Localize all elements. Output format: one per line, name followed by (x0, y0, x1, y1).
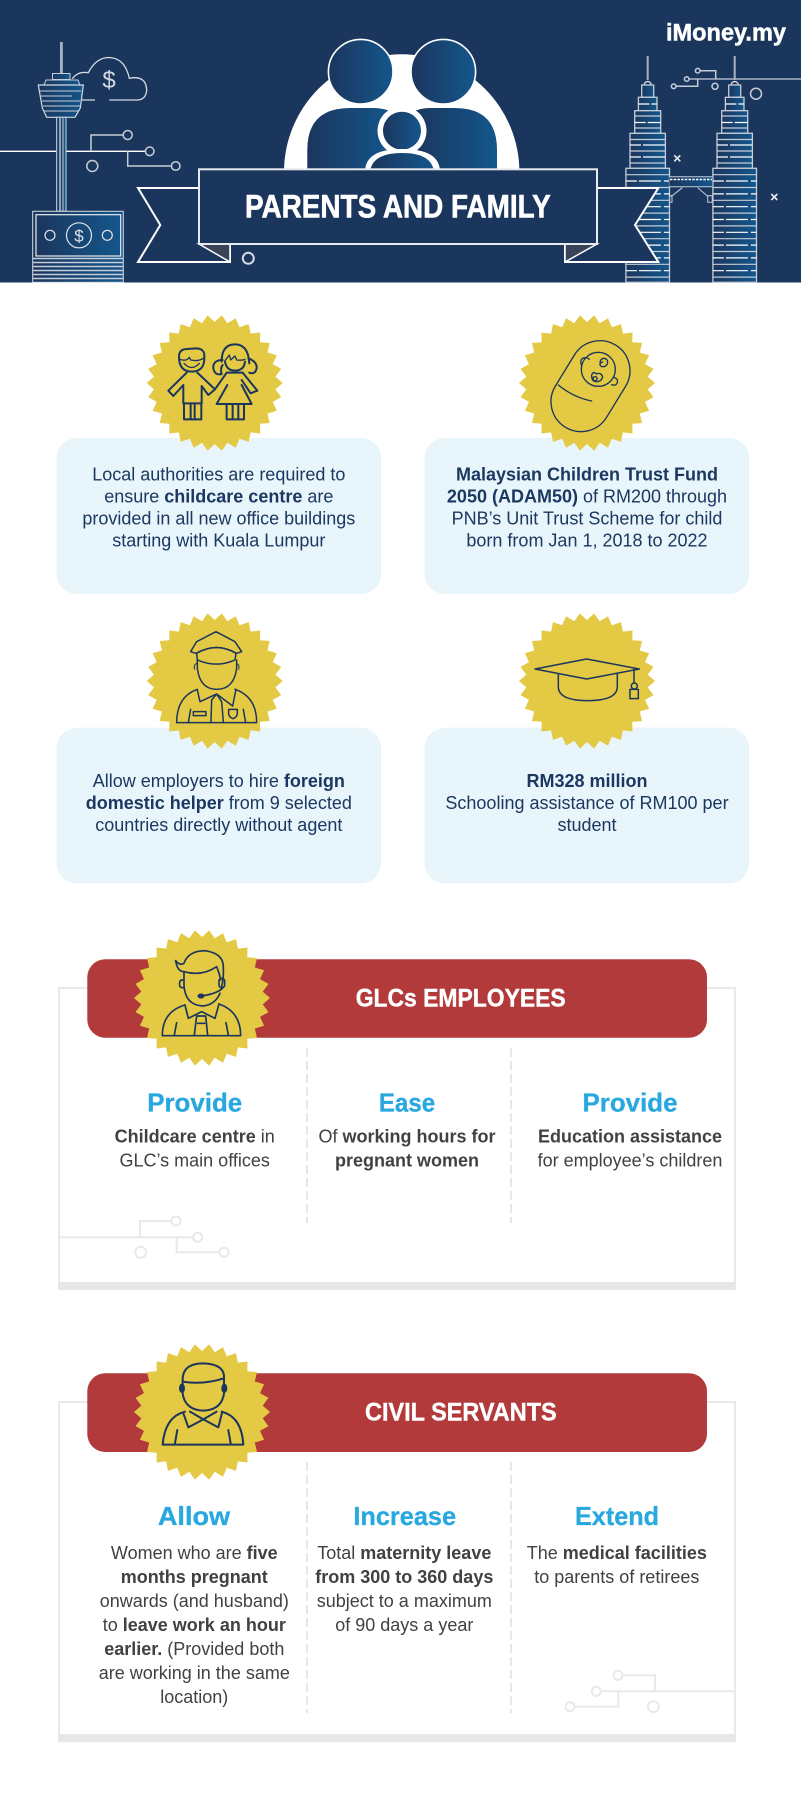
icon: right circuit (671, 68, 801, 99)
text: ADAM50: born from Jan 1, 2018 to 2022 (466, 530, 708, 550)
column: allow: are working in the same (99, 1663, 290, 1683)
heading: GLCs employees: GLCs EMPLOYEES (356, 985, 566, 1013)
text: childcare: ensure childcare centre are (104, 486, 333, 506)
column: provide childcare (115, 1088, 275, 1171)
column: ease working hours (318, 1088, 496, 1171)
column: provide childcare: Provide (147, 1088, 242, 1118)
column: extend: Extend (575, 1501, 659, 1531)
column: ease working hours: Of working hours for (318, 1127, 496, 1147)
red heading bar (87, 1373, 707, 1452)
column dividers (307, 1048, 511, 1223)
column: allow (99, 1501, 290, 1707)
column: allow: Women who are five (111, 1543, 278, 1563)
text: ADAM50: 2050 (ADAM50) of RM200 through (447, 486, 727, 506)
icon: KL tower (38, 42, 83, 211)
ribbon right fold (565, 244, 597, 262)
column: provide childcare: Childcare centre in (115, 1127, 275, 1147)
panel: header banner background (0, 0, 801, 282)
column: ease working hours: Ease (379, 1088, 435, 1118)
column: extend (527, 1501, 707, 1587)
icon: dollar cloud: $ (102, 67, 116, 94)
panel: ADAM50 card (425, 438, 749, 594)
icon badge: swaddled baby (519, 315, 655, 451)
icon: dollar cloud (72, 58, 147, 100)
column: provide education: Provide (582, 1088, 678, 1118)
column: allow: to leave work an hour (103, 1615, 286, 1635)
column: increase: Total maternity leave (317, 1543, 491, 1563)
column: increase: of 90 days a year (335, 1615, 473, 1635)
ribbon left tail (138, 188, 230, 262)
column: allow: Allow (158, 1501, 231, 1531)
text: foreign helper: countries directly without agent (95, 815, 342, 835)
ribbon right tail (565, 188, 658, 262)
icon badge: civil servant (134, 1344, 270, 1480)
column: extend: to parents of retirees (534, 1567, 699, 1587)
icon badge: call agent (134, 930, 270, 1066)
icon: left tower with cloud, circuit and banknote stack (0, 42, 180, 282)
panel: GLCs employees (58, 930, 736, 1290)
panel: childcare card (57, 438, 381, 594)
text: iMoney.my logo: iMoney.my (666, 20, 787, 46)
column: allow: earlier. (Provided both (104, 1639, 284, 1659)
icon: banknote stack: $ (74, 226, 84, 246)
icon badge: children (147, 315, 283, 451)
panel frame (58, 1402, 736, 1742)
icon: circuit lines left (0, 130, 180, 172)
column: provide education (538, 1088, 722, 1171)
text: ADAM50: PNB’s Unit Trust Scheme for child (452, 508, 722, 528)
column: ease working hours: pregnant women (335, 1151, 479, 1171)
text: foreign helper: Allow employers to hire foreign (93, 771, 345, 791)
panel: schooling card (425, 728, 749, 883)
icon: banknote stack (33, 211, 123, 282)
icon: cross marks (674, 155, 777, 200)
column dividers (307, 1462, 511, 1713)
heading: civil servants: CIVIL SERVANTS (365, 1399, 557, 1427)
icon badge: domestic helper (147, 613, 283, 749)
title text: PARENTS AND FAMILY (245, 189, 551, 225)
column: increase: subject to a maximum (317, 1591, 492, 1611)
decorative circuit (566, 1671, 735, 1712)
column: increase: Increase (353, 1501, 456, 1531)
icon: small ring (243, 253, 254, 264)
icon: family (parents and child) (284, 39, 519, 172)
column: provide education: Education assistance (538, 1127, 722, 1147)
column: extend: The medical facilities (527, 1543, 707, 1563)
text: schooling: student (557, 815, 617, 835)
text: childcare: starting with Kuala Lumpur (112, 530, 325, 550)
ribbon main panel (199, 169, 597, 244)
icon: Petronas twin towers (626, 56, 801, 282)
text: schooling: Schooling assistance of RM100 per (445, 793, 729, 813)
text: ADAM50: Malaysian Children Trust Fund (456, 464, 718, 484)
red heading bar (87, 959, 707, 1038)
icon badge: graduation cap (519, 613, 655, 749)
column: allow: location) (160, 1687, 228, 1707)
column: allow: onwards (and husband) (100, 1591, 289, 1611)
icon: skybridge (669, 177, 712, 202)
column: increase (315, 1501, 493, 1635)
column: provide education: for employee’s children (538, 1151, 722, 1171)
text: schooling: RM328 million (526, 771, 648, 791)
title ribbon (138, 169, 658, 262)
decorative circuit (59, 1216, 228, 1258)
panel: civil servants (58, 1344, 736, 1742)
text: childcare: Local authorities are required to (92, 464, 345, 484)
text: foreign helper: domestic helper from 9 selected (86, 793, 352, 813)
panel: foreign helper card (57, 728, 381, 883)
panel frame (58, 988, 736, 1290)
text: childcare: provided in all new office buildings (82, 508, 355, 528)
column: allow: months pregnant (121, 1567, 268, 1587)
column: provide childcare: GLC’s main offices (119, 1151, 270, 1171)
ribbon left fold (199, 244, 230, 262)
column: increase: from 300 to 360 days (315, 1567, 493, 1587)
